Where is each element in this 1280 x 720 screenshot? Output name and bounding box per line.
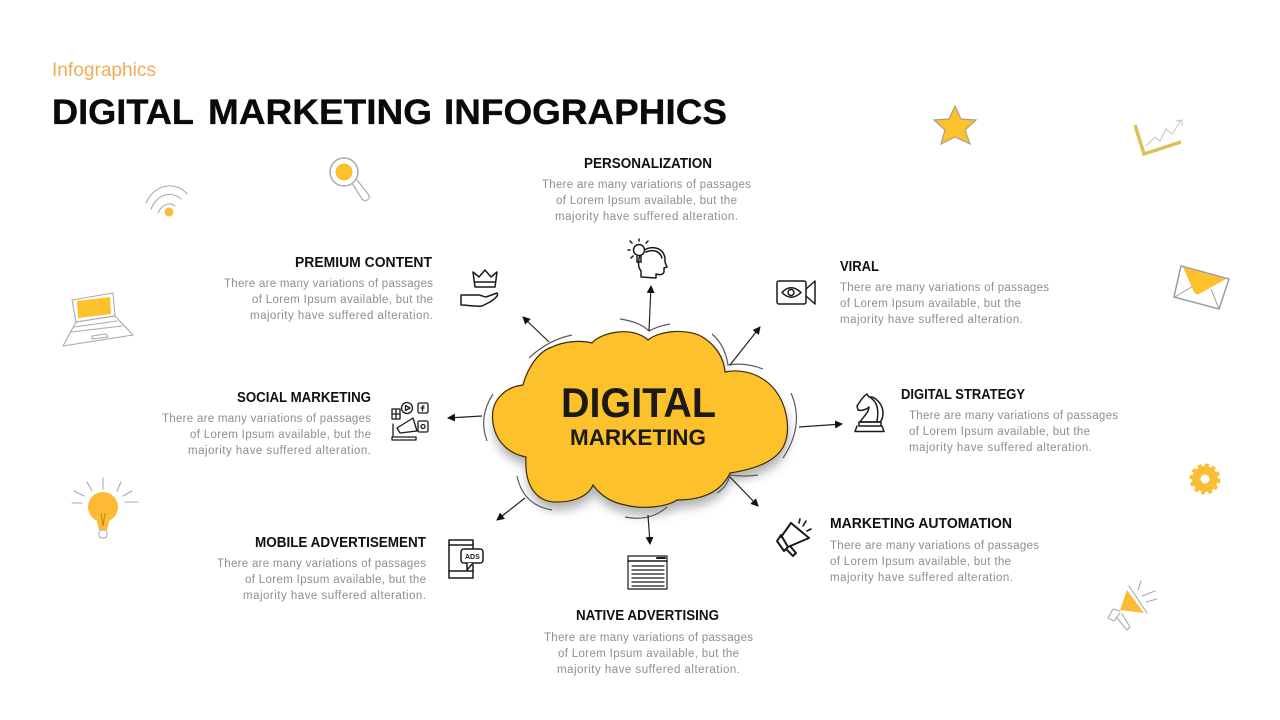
icon: chess knight — [855, 394, 884, 432]
icon: mobile ads: ADS — [465, 554, 480, 561]
icon: head with light bulb — [628, 239, 667, 278]
panel: mobile advertisement: MOBILE ADVERTISEMENT — [255, 535, 426, 551]
icon: mobile ads — [449, 540, 483, 578]
panel: viral — [840, 259, 1049, 326]
decor: wifi — [146, 186, 187, 216]
decor: growth chart — [1135, 120, 1182, 154]
panel: personalization — [542, 156, 751, 223]
panel: viral: There are many variations of passages — [840, 282, 1049, 294]
panel: social marketing: SOCIAL MARKETING — [237, 390, 371, 406]
title: DIGITAL — [52, 92, 194, 132]
cloud label: MARKETING — [570, 425, 706, 450]
decor: envelope — [1174, 266, 1229, 309]
panel: viral: of Lorem Ipsum available, but the — [840, 298, 1021, 310]
decor: star — [934, 106, 976, 144]
title: INFOGRAPHICS — [444, 92, 727, 132]
panel: personalization: There are many variations of passages — [542, 179, 751, 191]
central cloud — [492, 331, 789, 515]
panel: personalization: majority have suffered alteration. — [555, 211, 738, 223]
panel: marketing automation: majority have suffered alteration. — [830, 572, 1013, 584]
title — [52, 92, 727, 132]
panel: social marketing: of Lorem Ipsum available, but the — [190, 429, 371, 441]
panel: social marketing — [162, 390, 371, 457]
panel: premium content: of Lorem Ipsum available, but the — [252, 294, 433, 306]
panel: native advertising — [544, 608, 753, 676]
icon: social media — [392, 402, 428, 440]
panel: native advertising: There are many variations of passages — [544, 632, 753, 644]
panel: premium content: PREMIUM CONTENT — [295, 255, 432, 271]
arcs around the cloud — [484, 319, 796, 518]
panel: personalization: of Lorem Ipsum available, but the — [556, 195, 737, 207]
panel: mobile advertisement: majority have suffered alteration. — [243, 590, 426, 602]
decor: magnifier — [330, 158, 369, 201]
icon: web page window — [628, 556, 667, 589]
panel: premium content — [224, 255, 433, 322]
icon: megaphone — [777, 519, 811, 556]
arrows — [448, 286, 842, 544]
subtitle: Infographics — [52, 60, 156, 81]
panel: viral: VIRAL — [840, 259, 879, 275]
panel: marketing automation: MARKETING AUTOMATION — [830, 516, 1012, 532]
panel: digital strategy: There are many variations of passages — [909, 410, 1118, 422]
panel: marketing automation — [830, 516, 1039, 584]
panel: viral: majority have suffered alteration. — [840, 314, 1023, 326]
decor: light bulb — [72, 478, 138, 538]
title: MARKETING — [208, 92, 432, 132]
panel: premium content: majority have suffered alteration. — [250, 310, 433, 322]
decor: laptop — [63, 293, 133, 346]
cloud label — [561, 379, 716, 450]
panel: mobile advertisement: of Lorem Ipsum available, but the — [245, 574, 426, 586]
panel: mobile advertisement: There are many variations of passages — [217, 558, 426, 570]
panel: digital strategy: DIGITAL STRATEGY — [901, 387, 1025, 403]
icon: video camera with eye — [777, 281, 815, 304]
panel: digital strategy — [901, 387, 1118, 454]
panel: digital strategy: majority have suffered alteration. — [909, 442, 1092, 454]
panel: mobile advertisement — [217, 535, 426, 602]
panel: digital strategy: of Lorem Ipsum available, but the — [909, 426, 1090, 438]
panel: social marketing: There are many variations of passages — [162, 413, 371, 425]
panel: native advertising: majority have suffered alteration. — [557, 664, 740, 676]
panel: social marketing: majority have suffered alteration. — [188, 445, 371, 457]
icon: crown on hand — [461, 270, 498, 306]
panel: marketing automation: of Lorem Ipsum available, but the — [830, 556, 1011, 568]
panel: native advertising: of Lorem Ipsum available, but the — [558, 648, 739, 660]
panel: native advertising: NATIVE ADVERTISING — [576, 608, 719, 624]
decor: gear — [1191, 465, 1219, 493]
decor: megaphone — [1108, 581, 1157, 630]
panel: premium content: There are many variations of passages — [224, 278, 433, 290]
panel: personalization: PERSONALIZATION — [584, 156, 712, 172]
panel: marketing automation: There are many variations of passages — [830, 540, 1039, 552]
cloud label: DIGITAL — [561, 379, 716, 426]
